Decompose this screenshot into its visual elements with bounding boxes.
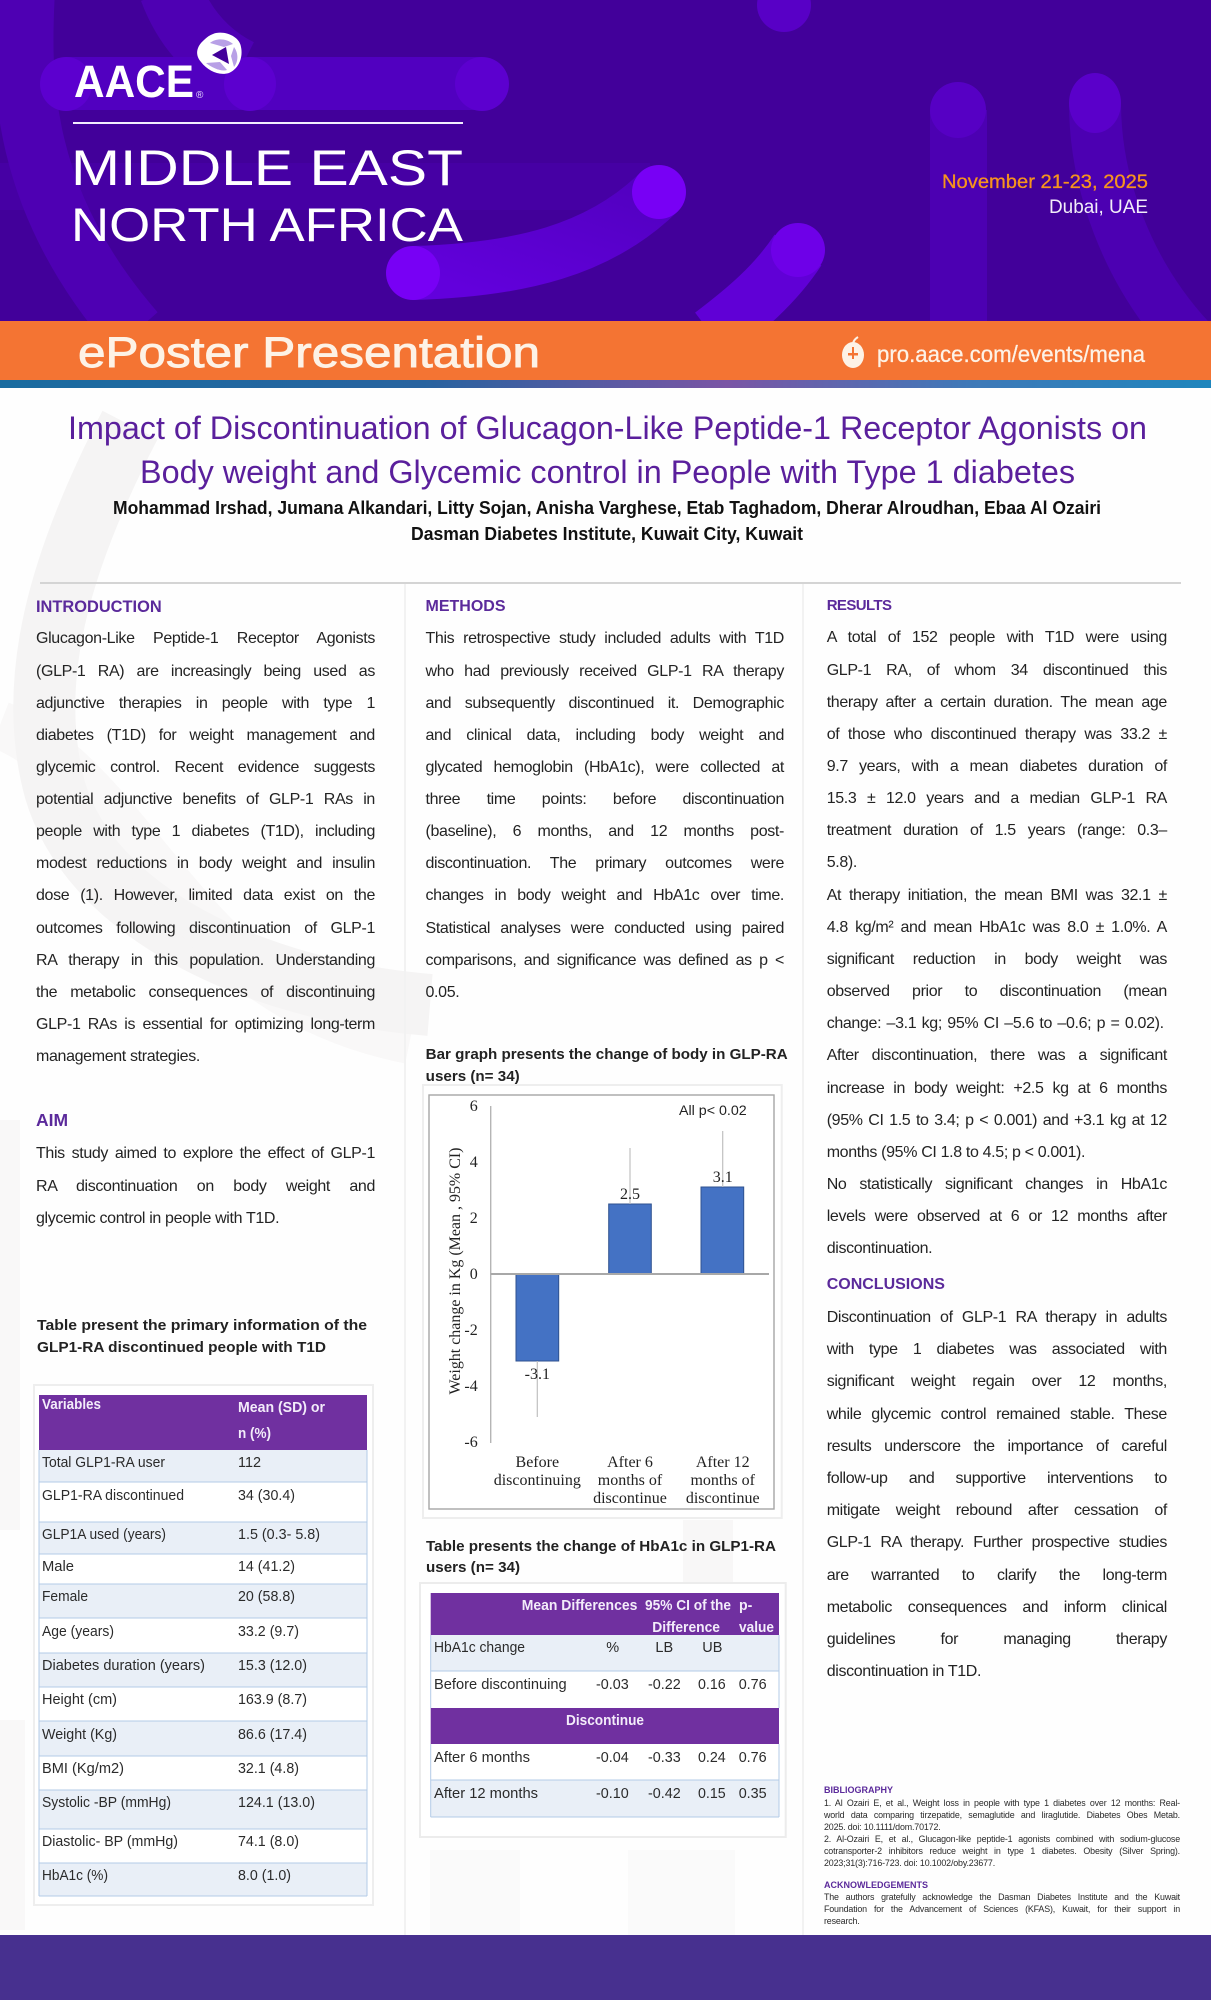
date and location: Dubai, UAE xyxy=(1049,197,1148,218)
text: conclusions body: results underscore the importance of careful xyxy=(827,1438,1167,1455)
table 1 rows: 34 (30.4) xyxy=(238,1488,295,1504)
text: aim body: RA discontinuation on body weight and xyxy=(36,1178,375,1195)
text: methods body: This retrospective study included adults with T1D xyxy=(426,630,784,647)
text: references: 2025. doi: 10.1111/dom.70172. xyxy=(824,1822,941,1832)
table 2 rows: -0.42 xyxy=(648,1786,681,1802)
panel: results xyxy=(826,596,1168,1257)
table 2 rows: % xyxy=(606,1640,619,1656)
text: results body: After discontinuation, there was a significant xyxy=(827,1047,1167,1064)
table 1 rows: 14 (41.2) xyxy=(238,1559,295,1575)
table 1 rows: Female xyxy=(42,1589,88,1605)
text: introduction body: glycemic control. Recent evidence suggests xyxy=(36,759,375,776)
panel: introduction xyxy=(36,598,375,1065)
table 1 heading: GLP1-RA discontinued people with T1D xyxy=(37,1339,326,1356)
y axis: 6 xyxy=(470,1098,478,1115)
table 1 rows: 86.6 (17.4) xyxy=(238,1727,307,1743)
table 2 rows: -0.03 xyxy=(596,1677,629,1693)
table 1 header: Mean (SD) or xyxy=(238,1400,325,1416)
text: conclusions body: while glycemic control remained stable. These xyxy=(827,1406,1167,1423)
text: introduction body: people with type 1 diabetes (T1D), including xyxy=(36,823,375,840)
authors and affiliation: Mohammad Irshad, Jumana Alkandari, Litty Sojan, Anisha Varghese, Etab Taghadom, Dherar Alroudhan, Ebaa Al Ozairi xyxy=(113,498,1101,518)
table 2 rows: 0.15 xyxy=(698,1786,726,1802)
significance note: All p< 0.02 xyxy=(679,1102,747,1118)
date and location: November 21-23, 2025 xyxy=(942,172,1148,193)
table 1 rows: 1.5 (0.3- 5.8) xyxy=(238,1527,320,1543)
table 1 rows: 15.3 (12.0) xyxy=(238,1658,307,1674)
table 1 rows: Male xyxy=(42,1559,74,1575)
text: introduction body: potential adjunctive benefits of GLP-1 RAs in xyxy=(36,791,375,808)
panel: methods xyxy=(426,598,784,1001)
table 2 rows: LB xyxy=(655,1640,673,1656)
category labels: discontinue xyxy=(593,1490,667,1507)
header banner: ® xyxy=(196,90,204,101)
text: results body: A total of 152 people with T1D were using xyxy=(827,629,1167,646)
poster title: Impact of Discontinuation of Glucagon-Like Peptide-1 Receptor Agonists on xyxy=(68,410,1147,446)
table 2 rows: 0.76 xyxy=(739,1677,767,1693)
table 2 rows: After 6 months xyxy=(434,1750,530,1766)
text: conclusions body: guidelines for managing therapy xyxy=(827,1631,1167,1648)
table 2 header: 95% CI of the xyxy=(645,1598,731,1614)
icon: AACE knot logo xyxy=(197,33,242,74)
table 1 rows: 33.2 (9.7) xyxy=(238,1624,299,1640)
table 1 rows: HbA1c (%) xyxy=(42,1868,108,1884)
poster title: Body weight and Glycemic control in People with Type 1 diabetes xyxy=(140,454,1075,490)
panel: aim xyxy=(36,1110,375,1227)
text: results body: 9.7 years, with a mean diabetes duration of xyxy=(827,758,1167,775)
text: acknowledgements: Foundation for the Advancement of Sciences (KFAS), Kuwait, for their support in xyxy=(824,1904,1180,1914)
text: results body: observed prior to discontinuation (mean xyxy=(827,983,1167,1000)
text: methods body: comparisons, and significance was defined as p < xyxy=(426,952,784,969)
category labels: months of xyxy=(598,1472,663,1489)
table 2 header: value xyxy=(739,1620,774,1636)
table 1 rows: 8.0 (1.0) xyxy=(238,1868,291,1884)
text: results body: of those who discontinued therapy was 33.2 ± xyxy=(827,726,1167,743)
text: methods body: and clinical data, including body weight and xyxy=(426,727,784,744)
table 1 heading xyxy=(37,1317,367,1356)
category labels: After 6 xyxy=(607,1454,653,1471)
text: methods body: three time points: before discontinuation xyxy=(426,791,784,808)
table 2 rows: HbA1c change xyxy=(434,1640,525,1656)
table 2 heading xyxy=(426,1538,776,1576)
text: conclusions body: follow-up and supportive interventions to xyxy=(827,1470,1167,1487)
table 1 rows: Diabetes duration (years) xyxy=(42,1658,205,1674)
table 2 rows: 0.24 xyxy=(698,1750,726,1766)
text: methods body: glycated hemoglobin (HbA1c), were collected at xyxy=(426,759,784,776)
header banner xyxy=(0,0,1211,340)
y axis: 4 xyxy=(470,1154,478,1171)
heading: bibliography: BIBLIOGRAPHY xyxy=(824,1784,893,1794)
table 2 rows: Before discontinuing xyxy=(434,1677,567,1693)
text: acknowledgements: research. xyxy=(824,1916,860,1926)
table 1 rows: 163.9 (8.7) xyxy=(238,1692,307,1708)
y axis: 2 xyxy=(470,1210,478,1227)
table 2 rows xyxy=(434,1640,767,1802)
table 1: primary information xyxy=(34,1385,373,1905)
table 2 rows: UB xyxy=(702,1640,722,1656)
text: introduction body: diabetes (T1D) for weight management and xyxy=(36,727,375,744)
text: conclusions body: with type 1 diabetes was associated with xyxy=(827,1341,1167,1358)
category labels: discontinue xyxy=(686,1490,760,1507)
text: acknowledgements: The authors gratefully acknowledge the Dasman Diabetes Institute and the Kuwait xyxy=(824,1892,1180,1902)
table 1 header: n (%) xyxy=(238,1426,271,1442)
text: methods body: who had previously received GLP-1 RA therapy xyxy=(426,663,784,680)
table 1 rows: Weight (Kg) xyxy=(42,1727,117,1743)
banner title: ePoster Presentation xyxy=(78,329,540,377)
text: conclusions body: mitigate weight rebound after cessation of xyxy=(827,1502,1167,1519)
banner url: pro.aace.com/events/mena xyxy=(877,341,1145,367)
text: conclusions body: discontinuation in T1D. xyxy=(827,1663,981,1680)
text: conclusions body: significant weight regain over 12 months, xyxy=(827,1373,1167,1390)
y axis: -4 xyxy=(464,1378,478,1395)
table 2 rows: -0.22 xyxy=(648,1677,681,1693)
table 1 rows: Diastolic- BP (mmHg) xyxy=(42,1834,178,1850)
text: results body xyxy=(826,629,1168,1257)
category labels: months of xyxy=(690,1472,756,1489)
authors and affiliation: Dasman Diabetes Institute, Kuwait City, Kuwait xyxy=(411,524,803,544)
text: results body: 15.3 ± 12.0 years and a median GLP-1 RA xyxy=(827,790,1167,807)
text: results body: No statistically significant changes in HbA1c xyxy=(827,1176,1167,1193)
table 1 rows: Age (years) xyxy=(42,1624,114,1640)
authors and affiliation xyxy=(113,498,1101,544)
text: introduction body: (GLP-1 RA) are increasingly being used as xyxy=(36,663,375,680)
text: conclusions body: Discontinuation of GLP-1 RA therapy in adults xyxy=(827,1309,1167,1326)
text: results body: (95% CI 1.5 to 3.4; p < 0.001) and +3.1 kg at 12 xyxy=(827,1112,1167,1129)
table 1 header: Variables xyxy=(42,1397,101,1413)
table 1 rows: 124.1 (13.0) xyxy=(238,1795,315,1811)
text: results body: significant reduction in body weight was xyxy=(827,951,1167,968)
text: methods body: 0.05. xyxy=(426,984,459,1001)
text: conclusions body: are warranted to clarify the long-term xyxy=(827,1567,1167,1584)
table 1 heading: Table present the primary information of the xyxy=(37,1317,367,1334)
table 2 heading: Table presents the change of HbA1c in GLP1-RA xyxy=(426,1538,776,1555)
category labels: discontinuing xyxy=(494,1472,581,1489)
text: methods body: Statistical analyses were conducted using paired xyxy=(426,920,784,937)
table 1 rows: 112 xyxy=(238,1455,261,1471)
orange ePoster banner xyxy=(0,321,1211,388)
table 1 header xyxy=(42,1397,325,1442)
text: aim body: glycemic control in people with T1D. xyxy=(36,1210,279,1227)
heading: introduction: INTRODUCTION xyxy=(36,598,162,616)
text: results body: GLP-1 RA, of whom 34 discontinued this xyxy=(827,662,1167,679)
text: aim body xyxy=(36,1145,375,1227)
text: results body: therapy after a certain duration. The mean age xyxy=(827,694,1167,711)
table 1 rows: 20 (58.8) xyxy=(238,1589,295,1605)
bars xyxy=(516,1187,744,1361)
text: references: 2023;31(3):716-723. doi: 10.1002/oby.23677. xyxy=(824,1858,995,1868)
panel: bibliography and acknowledgements xyxy=(824,1784,1180,1926)
text: conclusions body xyxy=(826,1309,1168,1680)
bar chart heading: users (n= 34) xyxy=(426,1068,520,1085)
table 2 rows: After 12 months xyxy=(434,1786,538,1802)
y axis title: Weight change in Kg (Mean , 95% CI) xyxy=(447,1148,464,1394)
table 2 rows: -0.10 xyxy=(596,1786,629,1802)
y axis: -6 xyxy=(464,1434,478,1451)
heading: aim: AIM xyxy=(36,1110,68,1130)
bar chart: weight change xyxy=(423,1085,782,1518)
text: references: 2. Al-Ozairi E, et al., Glucagon-like peptide-1 agonists combined with sodium-glucose xyxy=(824,1834,1180,1844)
text: results body: discontinuation. xyxy=(827,1240,932,1257)
text: results body: treatment duration of 1.5 years (range: 0.3– xyxy=(827,822,1167,839)
heading: acknowledgements: ACKNOWLEDGEMENTS xyxy=(824,1880,928,1890)
table 1 rows: GLP1-RA discontinued xyxy=(42,1488,184,1504)
error bars xyxy=(537,1131,723,1417)
category labels: After 12 xyxy=(696,1454,750,1471)
page watermark xyxy=(0,425,735,1935)
poster title xyxy=(68,410,1147,490)
table 2 header: Mean Differences xyxy=(522,1598,637,1614)
text: methods body: changes in body weight and HbA1c over time. xyxy=(426,887,784,904)
text: introduction body: outcomes following discontinuation of GLP-1 xyxy=(36,920,375,937)
logo wordmark: AACE xyxy=(74,56,194,107)
text: conclusions body: GLP-1 RA therapy. Further prospective studies xyxy=(827,1534,1167,1551)
text: results body: levels were observed at 6 or 12 months after xyxy=(827,1208,1167,1225)
text: introduction body: RA therapy in this population. Understanding xyxy=(36,952,375,969)
text: references: 1. Al Ozairi E, et al., Weight loss in people with type 1 diabetes over 12 months: Real- xyxy=(824,1798,1180,1808)
value labels: 3.1 xyxy=(713,1169,733,1186)
text: introduction body xyxy=(36,630,375,1065)
text: methods body: discontinuation. The primary outcomes were xyxy=(426,855,784,872)
table 1 rows: Total GLP1-RA user xyxy=(42,1455,165,1471)
table 2 rows: 0.76 xyxy=(739,1750,767,1766)
text: introduction body: Glucagon-Like Peptide-1 Receptor Agonists xyxy=(36,630,375,647)
conference name xyxy=(71,140,464,251)
table 1 rows: 32.1 (4.8) xyxy=(238,1761,299,1777)
bar chart heading: Bar graph presents the change of body in GLP-RA xyxy=(426,1046,788,1063)
icon: link cursor xyxy=(842,337,864,368)
text: results body: 5.8). xyxy=(827,854,857,871)
text: references xyxy=(824,1798,1180,1868)
text: results body: At therapy initiation, the mean BMI was 32.1 ± xyxy=(827,887,1167,904)
table 2 rows: -0.04 xyxy=(596,1750,629,1766)
text: methods body: and subsequently discontinued it. Demographic xyxy=(426,695,784,712)
text: methods body: (baseline), 6 months, and 12 months post- xyxy=(426,823,784,840)
text: results body: change: –3.1 kg; 95% CI –5.6 to –0.6; p = 0.02). xyxy=(827,1015,1164,1032)
table 2 rows: Discontinue xyxy=(566,1713,644,1729)
category labels: Before xyxy=(516,1454,559,1471)
table 2 rows: -0.33 xyxy=(648,1750,681,1766)
text: conclusions body: metabolic consequences and inform clinical xyxy=(827,1599,1167,1616)
y axis: -2 xyxy=(464,1322,478,1339)
y axis: 0 xyxy=(470,1266,478,1283)
text: results body: months (95% CI 1.8 to 4.5; p < 0.001). xyxy=(827,1144,1085,1161)
text: introduction body: adjunctive therapies in people with type 1 xyxy=(36,695,375,712)
table 1 rows: Systolic -BP (mmHg) xyxy=(42,1795,171,1811)
y axis xyxy=(464,1098,478,1451)
heading: conclusions: CONCLUSIONS xyxy=(827,1276,945,1292)
table 2 header xyxy=(522,1598,774,1636)
text: acknowledgements xyxy=(824,1892,1180,1926)
conference name: NORTH AFRICA xyxy=(71,198,464,251)
heading: results: RESULTS xyxy=(827,596,891,614)
text: results body: 4.8 kg/m² and mean HbA1c was 8.0 ± 1.0%. A xyxy=(827,919,1167,936)
category labels xyxy=(494,1454,760,1507)
table 2 rows: 0.35 xyxy=(739,1786,767,1802)
value labels: 2.5 xyxy=(620,1186,640,1203)
table 2: HbA1c change xyxy=(420,1583,786,1837)
bar chart heading xyxy=(426,1046,788,1085)
text: results body: increase in body weight: +2.5 kg at 6 months xyxy=(827,1080,1167,1097)
text: introduction body: GLP-1 RAs is essential for optimizing long-term xyxy=(36,1016,375,1033)
table 2 header: Difference xyxy=(652,1620,720,1636)
table 1 rows: GLP1A used (years) xyxy=(42,1527,166,1543)
panel: conclusions xyxy=(826,1276,1168,1680)
table 2 heading: users (n= 34) xyxy=(426,1559,520,1576)
text: methods body xyxy=(426,630,784,1001)
text: references: world data comparing tirzepatide, semaglutide and liraglutide. Diabetes Obes Metab. xyxy=(824,1810,1180,1820)
footer bar xyxy=(0,1935,1211,2000)
text: introduction body: dose (1). However, limited data exist on the xyxy=(36,887,375,904)
heading: methods: METHODS xyxy=(426,598,506,614)
text: aim body: This study aimed to explore the effect of GLP-1 xyxy=(36,1145,375,1162)
conference name: MIDDLE EAST xyxy=(71,140,463,196)
value labels: -3.1 xyxy=(525,1366,550,1383)
text: introduction body: management strategies. xyxy=(36,1048,200,1065)
text: references: cotransporter-2 inhibitors reduce weight in type 1 diabetes. Obesity (Silver Spring). xyxy=(824,1846,1180,1856)
table 1 rows: BMI (Kg/m2) xyxy=(42,1761,124,1777)
value labels xyxy=(525,1169,733,1383)
table 2 header: p- xyxy=(739,1598,752,1614)
text: introduction body: the metabolic consequences of discontinuing xyxy=(36,984,375,1001)
table 1 rows: Height (cm) xyxy=(42,1692,117,1708)
table 2 rows: 0.16 xyxy=(698,1677,726,1693)
table 1 rows: 74.1 (8.0) xyxy=(238,1834,299,1850)
date and location xyxy=(942,172,1148,218)
text: introduction body: modest reductions in body weight and insulin xyxy=(36,855,375,872)
table 1 rows xyxy=(42,1455,320,1884)
